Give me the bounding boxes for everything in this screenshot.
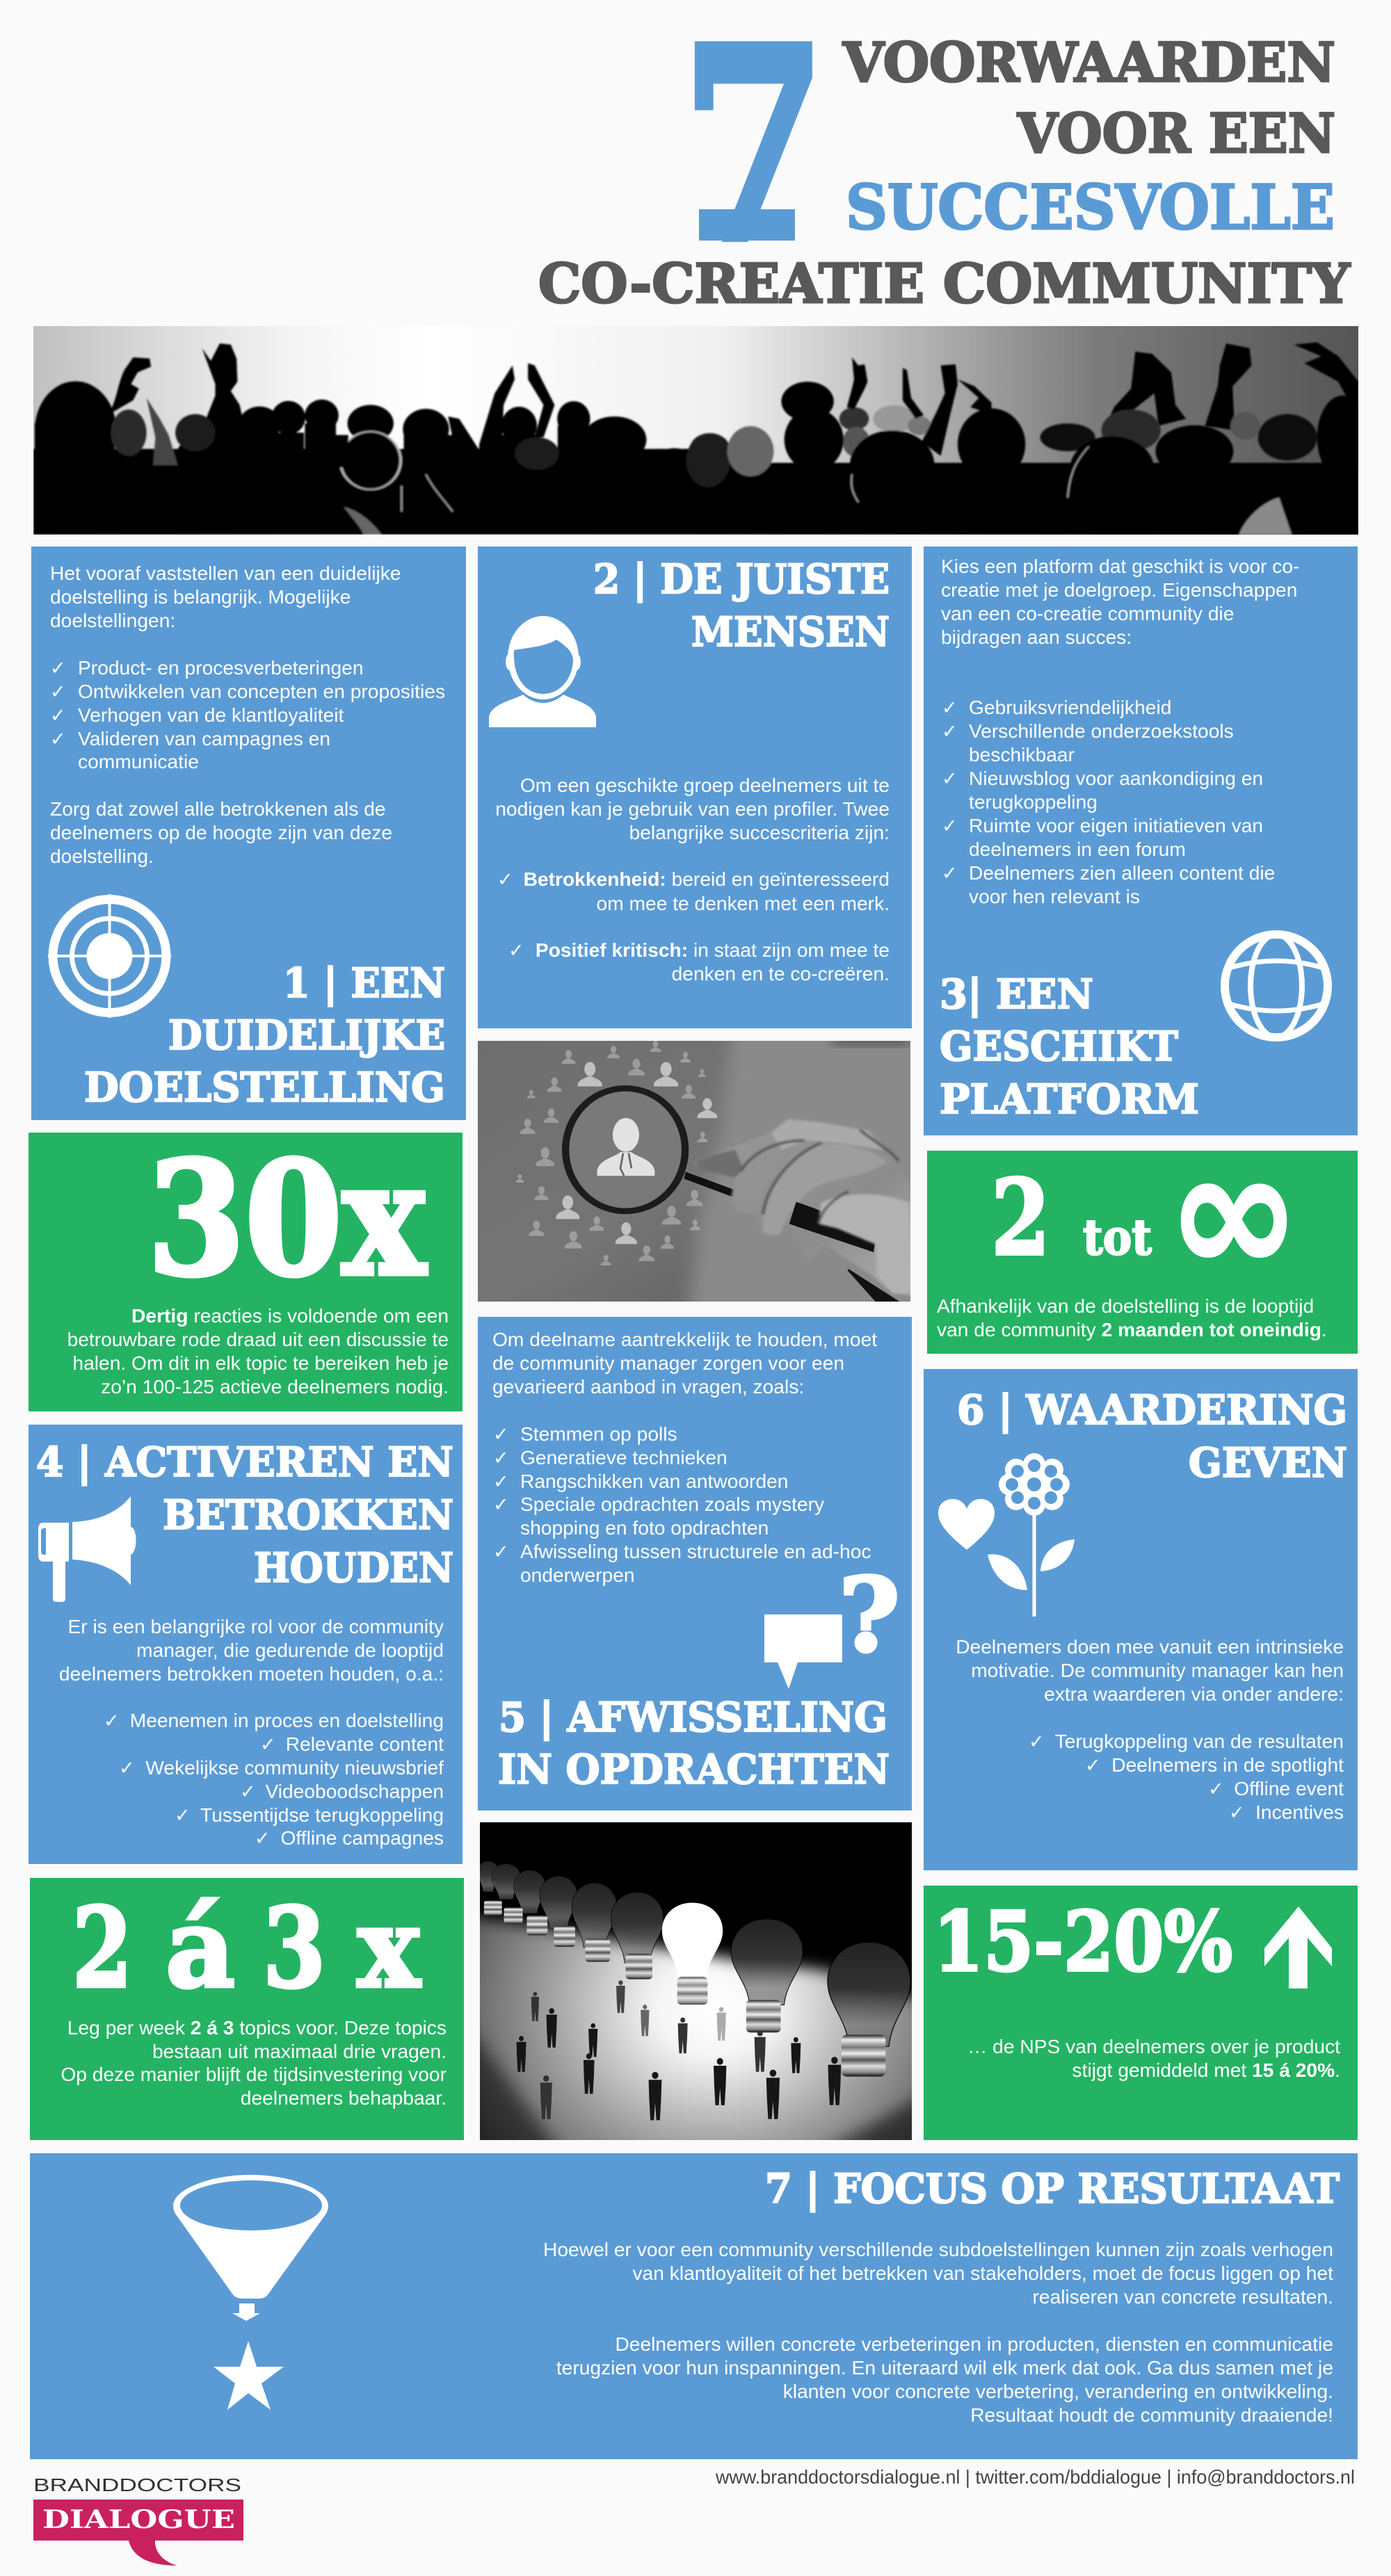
big number 2 a 3 x: 3 bbox=[263, 1884, 325, 2013]
panel 3 intro text: bijdragen aan succes: bbox=[941, 626, 1132, 648]
panel 4 checklist: ✓ bbox=[104, 1710, 120, 1732]
icon: heart and flower bbox=[938, 1453, 1075, 1617]
panel: 1 een duidelijke doelstelling bbox=[31, 546, 466, 1120]
panel 4 checklist: ✓ bbox=[240, 1781, 256, 1803]
panel 7 paragraph two: terugzien voor hun inspanningen. En uiteraard wil elk merk dat ook. Ga dus samen met je bbox=[556, 2356, 1333, 2379]
panel 3 checklist: Deelnemers zien alleen content die bbox=[969, 861, 1275, 884]
panel 6 intro text bbox=[956, 1635, 1344, 1705]
panel 2 intro text: nodigen kan je gebruik van een profiler. Twee bbox=[495, 797, 890, 820]
photo: concert crowd bbox=[33, 326, 1368, 535]
30x explanation: halen. Om dit in elk topic te bereiken heb je bbox=[72, 1352, 449, 1374]
panel 4 checklist: Meenemen in proces en doelstelling bbox=[130, 1709, 444, 1731]
panel 4 intro text bbox=[59, 1615, 444, 1685]
panel 2 intro text bbox=[495, 774, 890, 843]
panel 5 checklist: ✓ bbox=[493, 1494, 509, 1516]
panel 5 checklist: ✓ bbox=[493, 1541, 509, 1563]
panel 4 heading: HOUDEN bbox=[254, 1544, 453, 1591]
panel 3 heading bbox=[940, 971, 1199, 1123]
dark bulbs in row bbox=[478, 1861, 910, 2046]
panel 3 intro text bbox=[941, 555, 1299, 648]
looptijd explanation: Afhankelijk van de doelstelling is de looptijd bbox=[937, 1295, 1314, 1317]
panel 1 checklist: Product- en procesverbeteringen bbox=[78, 656, 364, 679]
logo: branddoctors dialogue bbox=[33, 2474, 243, 2566]
panel 4 intro text: manager, die gedurende de looptijd bbox=[136, 1639, 444, 1661]
topics explanation: Leg per week 2 á 3 topics voor. Deze topics bbox=[67, 2016, 447, 2039]
panel 6 checklist: ✓ bbox=[1208, 1779, 1224, 1800]
panel 1 checklist: ✓ bbox=[50, 705, 66, 727]
panel 1 checklist bbox=[50, 656, 445, 772]
topics explanation: Op deze manier blijft de tijdsinvestering voor bbox=[61, 2063, 447, 2085]
panel 3 checklist: Nieuwsblog voor aankondiging en bbox=[969, 767, 1263, 789]
panel 1 heading: DUIDELIJKE bbox=[168, 1012, 445, 1059]
panel 5 intro text bbox=[492, 1328, 877, 1398]
big number 2: 2 bbox=[991, 1157, 1050, 1279]
panel 3 checklist: voor hen relevant is bbox=[969, 885, 1140, 907]
panel 1 intro text: doelstelling is belangrijk. Mogelijke bbox=[50, 585, 351, 608]
big number 30x: 30x bbox=[147, 1128, 427, 1311]
icon: arrow down bbox=[232, 2303, 260, 2321]
panel 3 checklist bbox=[942, 696, 1275, 907]
panel 1 intro text: doelstellingen: bbox=[50, 609, 175, 631]
panel 3 checklist: ✓ bbox=[942, 816, 958, 837]
panel 4 checklist: Videoboodschappen bbox=[265, 1780, 444, 1802]
panel 2 criteria: Betrokkenheid: bereid en geïnteresseerd bbox=[524, 868, 890, 890]
panel 2 intro text: Om een geschikte groep deelnemers uit te bbox=[520, 774, 890, 796]
30x explanation: zo’n 100-125 actieve deelnemers nodig. bbox=[101, 1375, 449, 1398]
NPS explanation: … de NPS van deelnemers over je product bbox=[967, 2035, 1340, 2057]
panel 7 paragraph two bbox=[556, 2333, 1333, 2426]
topics explanation: bestaan uit maximaal drie vragen. bbox=[152, 2040, 447, 2062]
30x explanation: betrouwbare rode draad uit een discussie te bbox=[67, 1328, 449, 1350]
panel 7 paragraph one bbox=[543, 2238, 1333, 2308]
panel 6 intro text: Deelnemers doen mee vanuit een intrinsieke bbox=[956, 1635, 1344, 1658]
panel 4 checklist: ✓ bbox=[175, 1805, 191, 1826]
panel 4 checklist: Relevante content bbox=[286, 1733, 444, 1755]
panel 1 intro text bbox=[50, 562, 401, 631]
panel 3 checklist: ✓ bbox=[942, 721, 958, 743]
stat panel: 15-20 percent bbox=[924, 1886, 1358, 2140]
panel: 4 activeren en betrokken houden bbox=[29, 1425, 463, 1864]
panel 5 checklist: ✓ bbox=[493, 1448, 509, 1469]
big number 2 a 3 x: x bbox=[357, 1884, 421, 2013]
panel 5 intro text: gevarieerd aanbod in vragen, zoals: bbox=[492, 1375, 804, 1398]
title line: voor een: VOOR EEN bbox=[1017, 102, 1335, 165]
word tot: tot bbox=[1083, 1208, 1152, 1266]
topics explanation bbox=[61, 2016, 447, 2109]
panel 4 intro text: Er is een belangrijke rol voor de community bbox=[67, 1615, 444, 1637]
panel 1 closing text bbox=[50, 797, 392, 867]
photo: magnifying glass over people icons bbox=[478, 1041, 910, 1302]
panel 3 checklist: terugkoppeling bbox=[969, 791, 1097, 813]
icon: speech bubble with question mark: ? bbox=[839, 1556, 900, 1675]
panel 1 checklist: ✓ bbox=[50, 681, 66, 703]
panel 3 intro text: van een co-creatie community die bbox=[941, 602, 1234, 624]
panel 6 checklist: ✓ bbox=[1029, 1731, 1045, 1753]
logo: branddoctors dialogue: BRANDDOCTORS bbox=[33, 2474, 241, 2495]
30x explanation: Dertig reacties is voldoende om een bbox=[131, 1304, 449, 1327]
panel 4 checklist: Wekelijkse community nieuwsbrief bbox=[145, 1756, 444, 1779]
logo: branddoctors dialogue: DIALOGUE bbox=[42, 2505, 235, 2534]
panel 6 heading bbox=[957, 1386, 1347, 1487]
panel 5 checklist bbox=[493, 1423, 871, 1586]
panel 3 heading: PLATFORM bbox=[940, 1076, 1199, 1123]
panel 3 heading: 3| EEN bbox=[940, 971, 1093, 1018]
panel: 5 afwisseling in opdrachten bbox=[478, 1317, 912, 1811]
panel 2 intro text: belangrijke succescriteria zijn: bbox=[629, 821, 890, 843]
panel 1 heading: 1 | EEN bbox=[283, 959, 445, 1007]
icon: person bbox=[489, 616, 596, 727]
panel 2 criteria: denken en te co-creëren. bbox=[672, 962, 890, 985]
panel 6 heading: GEVEN bbox=[1189, 1439, 1347, 1487]
panel 2 heading bbox=[593, 556, 890, 656]
panel 6 checklist: ✓ bbox=[1085, 1755, 1101, 1776]
panel 1 checklist: Ontwikkelen van concepten en proposities bbox=[78, 680, 445, 702]
panel 6 checklist: Offline event bbox=[1234, 1777, 1344, 1799]
panel 7 paragraph two: klanten voor concrete verbetering, verandering en ontwikkeling. bbox=[783, 2380, 1333, 2402]
panel 2 criteria: Positief kritisch: in staat zijn om mee te bbox=[536, 939, 890, 961]
title bbox=[538, 0, 1351, 316]
topics explanation: deelnemers behapbaar. bbox=[241, 2087, 447, 2109]
panel 4 heading bbox=[36, 1439, 453, 1591]
panel 4 heading: BETROKKEN bbox=[163, 1491, 453, 1539]
panel 5 checklist: onderwerpen bbox=[520, 1564, 635, 1586]
panel 6 heading: 6 | WAARDERING bbox=[957, 1386, 1347, 1434]
icon: star bbox=[214, 2341, 284, 2410]
panel 5 checklist: Generatieve technieken bbox=[520, 1446, 727, 1468]
title line: voorwaarden: VOORWAARDEN bbox=[842, 31, 1335, 95]
lit bulb bbox=[662, 1903, 723, 1977]
big number 15-20%: 15-20% bbox=[933, 1893, 1232, 1990]
looptijd explanation: van de community 2 maanden tot oneindig. bbox=[937, 1318, 1327, 1340]
panel 4 checklist: ✓ bbox=[255, 1828, 271, 1849]
panel 1 checklist: ✓ bbox=[50, 658, 66, 679]
panel 3 intro text: Kies een platform dat geschikt is voor co- bbox=[941, 555, 1299, 577]
panel 1 checklist: ✓ bbox=[50, 729, 66, 750]
panel 7 paragraph one: van klantloyaliteit of het betrekken van stakeholders, moet de focus liggen op het bbox=[632, 2262, 1333, 2284]
panel 5 checklist: ✓ bbox=[493, 1471, 509, 1493]
panel 3 checklist: ✓ bbox=[942, 863, 958, 884]
NPS explanation: stijgt gemiddeld met 15 á 20%. bbox=[1072, 2059, 1340, 2081]
panel 6 intro text: motivatie. De community manager kan hen bbox=[971, 1659, 1344, 1681]
panel 1 checklist: Valideren van campagnes en bbox=[78, 727, 330, 750]
title line: co-creatie community: CO-CREATIE COMMUNITY bbox=[538, 252, 1351, 316]
panel 1 checklist: Verhogen van de klantloyaliteit bbox=[78, 704, 344, 726]
panel 3 checklist: ✓ bbox=[942, 697, 958, 719]
panel 3 checklist: Verschillende onderzoekstools bbox=[969, 720, 1234, 742]
big number 2 a 3 x bbox=[72, 1884, 421, 2013]
panel 2 criteria: ✓ bbox=[497, 869, 513, 891]
big number 2 a 3 x: 2 bbox=[72, 1884, 132, 2013]
panel 2 heading: MENSEN bbox=[691, 608, 890, 656]
panel 1 closing text: doelstelling. bbox=[50, 845, 154, 867]
footer contact line: www.branddoctorsdialogue.nl | twitter.com/bddialogue | info@branddoctors.nl bbox=[715, 2466, 1355, 2488]
panel 4 checklist: ✓ bbox=[260, 1734, 276, 1756]
big number 2 a 3 x: á bbox=[166, 1884, 235, 2013]
magnifier lens bbox=[565, 1088, 685, 1211]
panel: 3 een geschikt platform bbox=[924, 546, 1358, 1135]
icon: target bbox=[48, 894, 171, 1018]
panel 6 checklist: ✓ bbox=[1229, 1802, 1245, 1824]
panel 3 checklist: ✓ bbox=[942, 768, 958, 790]
panel 1 heading bbox=[84, 959, 445, 1111]
background people icons bbox=[516, 1041, 708, 1265]
panel 5 heading: IN OPDRACHTEN bbox=[498, 1746, 890, 1793]
panel: 7 focus op resultaat bbox=[30, 2153, 1358, 2459]
magnifier handle bbox=[684, 1172, 901, 1303]
panel 7 paragraph two: Resultaat houdt de community draaiende! bbox=[970, 2404, 1333, 2426]
panel 1 intro text: Het vooraf vaststellen van een duidelijke bbox=[50, 562, 401, 584]
photo: light bulbs and people bbox=[480, 1822, 912, 2140]
panel 1 closing text: Zorg dat zowel alle betrokkenen als de bbox=[50, 797, 386, 820]
panel: 2 de juiste mensen bbox=[478, 546, 912, 1028]
panel 4 checklist bbox=[104, 1709, 444, 1849]
panel 6 intro text: extra waarderen via onder andere: bbox=[1044, 1683, 1344, 1705]
panel 2 criteria: om mee te denken met een merk. bbox=[597, 892, 890, 914]
panel 6 checklist: Incentives bbox=[1255, 1801, 1344, 1823]
stat panel: 2 a 3 x bbox=[30, 1878, 464, 2140]
panel 5 checklist: Afwisseling tussen structurele en ad-hoc bbox=[520, 1540, 871, 1562]
icon: megaphone bbox=[38, 1496, 136, 1602]
panel 5 checklist: ✓ bbox=[493, 1424, 509, 1445]
panel 5 heading: 5 | AFWISSELING bbox=[499, 1694, 887, 1741]
NPS explanation bbox=[967, 2035, 1340, 2081]
infinity sign: ∞ bbox=[1167, 1111, 1301, 1313]
looptijd explanation bbox=[937, 1295, 1327, 1340]
panel 7 paragraph one: Hoewel er voor een community verschillende subdoelstellingen kunnen zijn zoals verhogen bbox=[543, 2238, 1333, 2260]
panel 5 intro text: Om deelname aantrekkelijk te houden, moet bbox=[492, 1328, 877, 1350]
panel 1 heading: DOELSTELLING bbox=[84, 1064, 445, 1111]
panel 3 checklist: beschikbaar bbox=[969, 743, 1075, 765]
panel 3 checklist: deelnemers in een forum bbox=[969, 838, 1186, 860]
panel 5 checklist: Speciale opdrachten zoals mystery bbox=[520, 1493, 825, 1515]
panel 7 paragraph one: realiseren van concrete resultaten. bbox=[1033, 2285, 1333, 2308]
tiny people bbox=[517, 1980, 841, 2120]
panel 5 checklist: shopping en foto opdrachten bbox=[520, 1516, 769, 1539]
panel 5 intro text: de community manager zorgen voor een bbox=[492, 1352, 844, 1374]
panel 7 heading: 7 | FOCUS OP RESULTAAT bbox=[765, 2165, 1340, 2212]
panel 4 checklist: ✓ bbox=[119, 1758, 135, 1779]
panel 2 criteria bbox=[497, 868, 890, 985]
panel 3 checklist: Ruimte voor eigen initiatieven van bbox=[969, 814, 1263, 836]
panel 1 closing text: deelnemers op de hoogte zijn van deze bbox=[50, 821, 392, 843]
panel 5 checklist: Stemmen op polls bbox=[520, 1423, 677, 1445]
stat panel: 2 tot oneindig bbox=[927, 1111, 1358, 1354]
panel 5 heading bbox=[498, 1694, 890, 1793]
30x explanation bbox=[67, 1304, 449, 1398]
panel 4 intro text: deelnemers betrokken moeten houden, o.a.: bbox=[59, 1662, 444, 1685]
panel 6 checklist bbox=[1029, 1730, 1344, 1824]
panel 2 criteria: ✓ bbox=[508, 940, 524, 962]
panel: 6 waardering geven bbox=[924, 1369, 1358, 1870]
panel 4 heading: 4 | ACTIVEREN EN bbox=[36, 1439, 453, 1486]
panel 2 heading: 2 | DE JUISTE bbox=[593, 556, 890, 603]
hand bbox=[693, 1119, 915, 1296]
bulb bases bbox=[484, 1900, 885, 2077]
panel 3 intro text: creatie met je doelgroep. Eigenschappen bbox=[941, 578, 1297, 601]
icon: speech bubble with question mark bbox=[764, 1556, 900, 1689]
panel 7 paragraph two: Deelnemers willen concrete verbeteringen in producten, diensten en communicatie bbox=[615, 2333, 1333, 2355]
panel 6 checklist: Deelnemers in de spotlight bbox=[1111, 1753, 1344, 1776]
icon: up arrow bbox=[1264, 1906, 1332, 1988]
title line: succesvolle: SUCCESVOLLE bbox=[846, 171, 1335, 243]
panel 6 checklist: Terugkoppeling van de resultaten bbox=[1055, 1730, 1344, 1752]
panel 3 heading: GESCHIKT bbox=[940, 1023, 1178, 1070]
panel 3 checklist: Gebruiksvriendelijkheid bbox=[969, 696, 1171, 718]
icon: funnel bbox=[173, 2175, 328, 2299]
panel 1 checklist: communicatie bbox=[78, 750, 199, 772]
stat panel: 30x bbox=[29, 1128, 463, 1411]
panel 4 checklist: Tussentijdse terugkoppeling bbox=[200, 1804, 444, 1826]
panel 4 checklist: Offline campagnes bbox=[280, 1826, 444, 1849]
panel 5 checklist: Rangschikken van antwoorden bbox=[520, 1470, 788, 1492]
icon: globe bbox=[1225, 934, 1328, 1037]
